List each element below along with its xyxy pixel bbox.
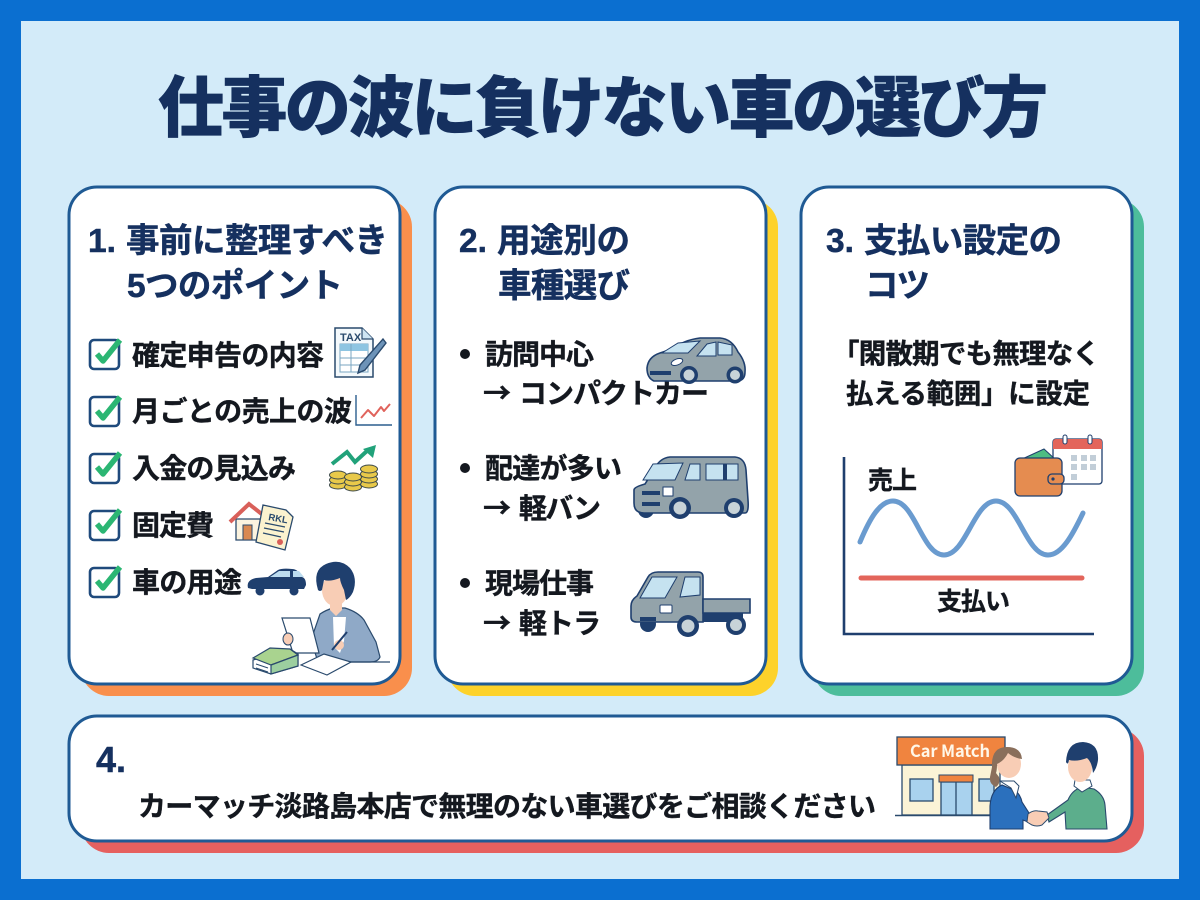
list item: delivery (460, 452, 622, 527)
icon: compact car (647, 338, 745, 384)
panel: 3 payment settings (801, 187, 1144, 696)
list item: site work: 現場仕事 (485, 568, 594, 599)
icon: tax document and pen: TAX (340, 332, 362, 344)
heading: panel 2: 2. (459, 223, 487, 260)
illustration: person doing paperwork (253, 562, 390, 675)
checklist: 確定申告の内容 (132, 340, 324, 371)
icon: tax document and pen (335, 328, 386, 377)
heading: panel 2 (459, 223, 630, 305)
icon: wallet and calendar (1015, 435, 1102, 496)
icon: house and contract: RKL (267, 512, 289, 526)
illustration: store and handshake: Car Match (910, 738, 990, 762)
text: payment advice (832, 338, 1100, 409)
heading: panel 2: 車種選び (498, 268, 630, 305)
icon: house and contract (230, 504, 293, 550)
heading: panel 3 (826, 223, 1062, 305)
heading: panel 3: 支払い設定の (864, 223, 1062, 260)
checklist (90, 340, 352, 598)
list item: site work (460, 568, 601, 642)
list item: delivery: 配達が多い (485, 452, 622, 484)
panel: 1 points to organize (69, 187, 412, 696)
checklist: 月ごとの売上の波 (132, 395, 352, 427)
text: consultation message: カーマッチ淡路島本店で無理のない車選びをご相談ください (138, 790, 876, 822)
icon: kei van (634, 457, 748, 519)
list item: delivery: → (483, 487, 511, 527)
heading: panel 1: 事前に整理すべき (126, 223, 388, 260)
panel: 4 consultation call to action (69, 716, 1144, 853)
chart: sales wave vs flat payment (844, 457, 1094, 634)
heading: panel 1: 5つのポイント (127, 268, 343, 305)
icon: sales line chart (356, 395, 392, 425)
list item: visits: 訪問中心 (485, 339, 594, 370)
list item: site work: 軽トラ (519, 602, 601, 642)
chart: sales wave vs flat payment: 売上 (868, 467, 917, 495)
checklist: 入金の見込み (132, 453, 296, 484)
icon: navy car (248, 569, 306, 596)
heading: panel 3: 3. (826, 223, 854, 260)
chart: sales wave vs flat payment: 支払い (937, 588, 1010, 616)
illustration: store and handshake (895, 737, 1107, 829)
title: 仕事の波に負けない車の選び方 (158, 71, 1048, 145)
number 4: 4. (96, 739, 126, 780)
heading: panel 1 (88, 223, 388, 305)
icon: kei truck (631, 572, 750, 637)
text: payment advice: 払える範囲」に設定 (846, 378, 1090, 409)
panel: 2 vehicle type by use (435, 187, 778, 696)
text: payment advice: 「閑散期でも無理なく (832, 338, 1100, 369)
heading: panel 1: 1. (88, 223, 116, 260)
heading: panel 2: 用途別の (497, 223, 630, 260)
list item: site work: → (483, 602, 511, 642)
list item: visits (460, 339, 709, 412)
checklist: 車の用途 (132, 567, 242, 598)
list item: visits: コンパクトカー (519, 372, 709, 412)
icon: coins and rising arrow (330, 445, 378, 491)
checklist: 固定費 (132, 510, 214, 541)
heading: panel 3: コツ (865, 268, 930, 305)
list item: visits: → (483, 372, 511, 412)
list item: delivery: 軽バン (519, 487, 601, 527)
